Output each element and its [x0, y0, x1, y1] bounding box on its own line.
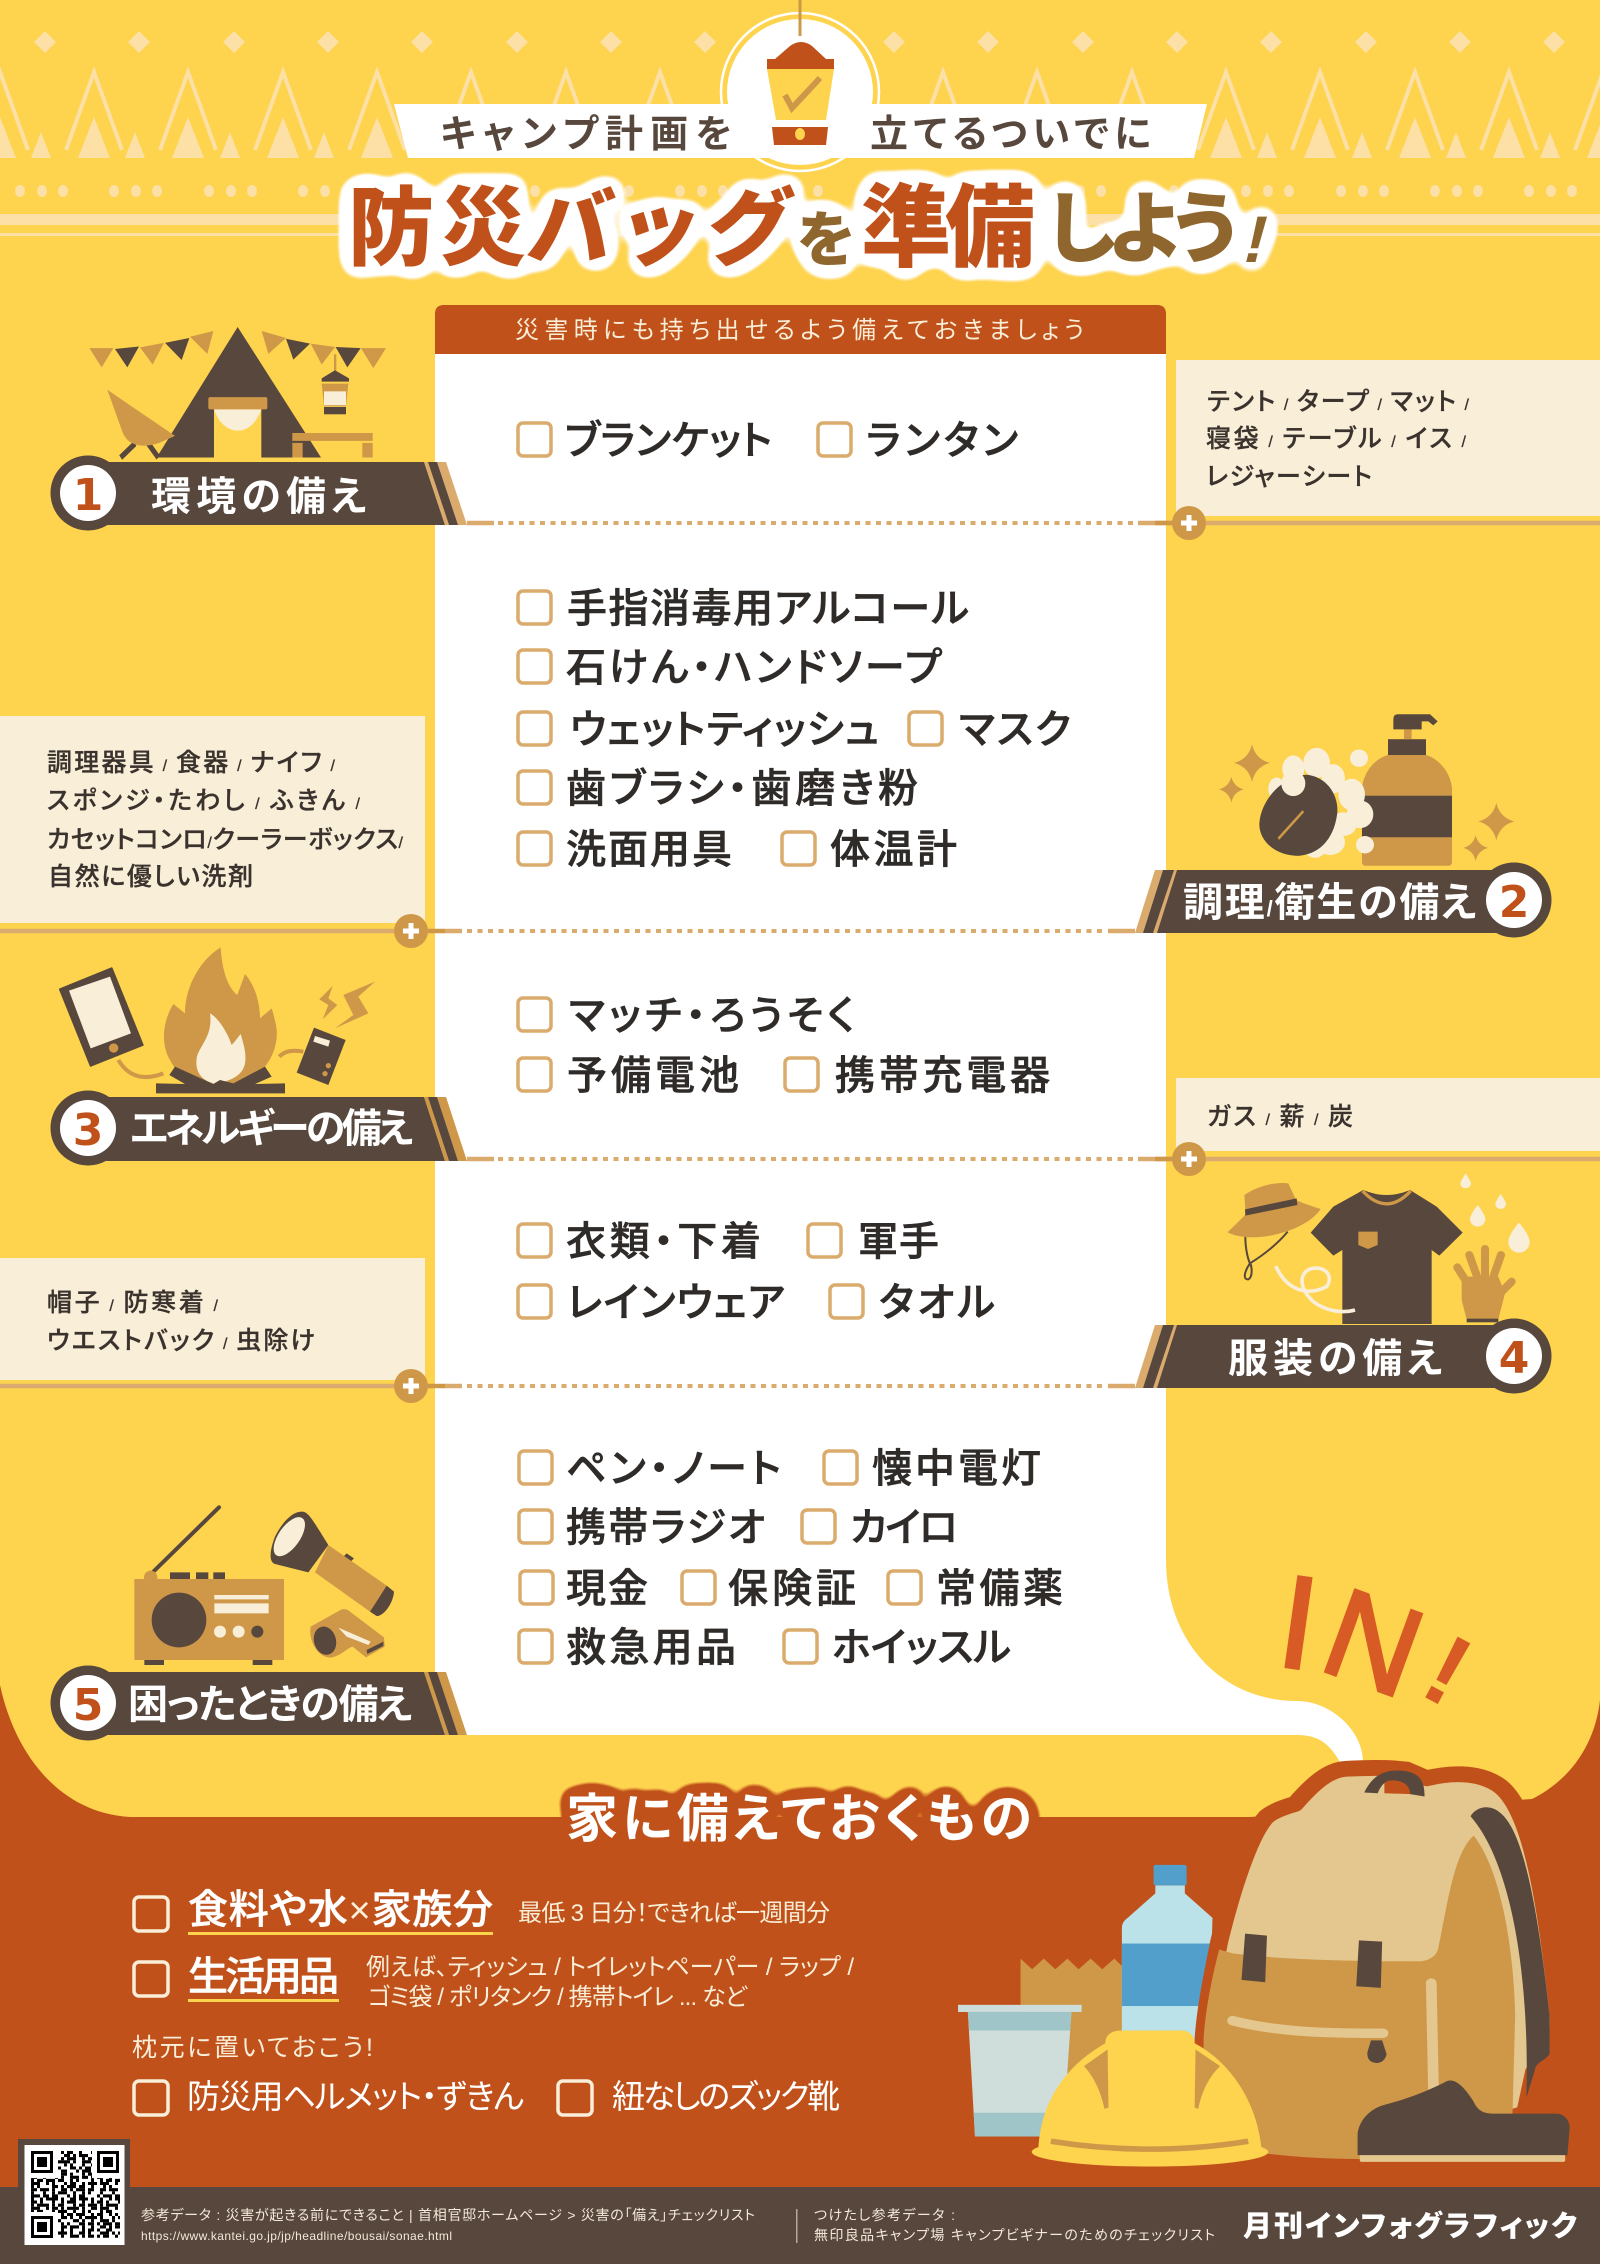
footer bar	[0, 2187, 1600, 2264]
checklist: items at home	[132, 1888, 854, 2115]
checklist: emergency: 現金	[566, 1567, 648, 1611]
checklist header text: 災害時にも持ち出せるよう備えておきましょう	[515, 317, 1084, 344]
checklist: energy: マッチ・ろうそく	[569, 994, 855, 1038]
checklist header bar	[435, 305, 1166, 354]
daily goods note: 例えば、ティッシュ / トイレットペーパー / ラップ /	[366, 1954, 854, 1981]
checklist: clothing: タオル	[879, 1281, 995, 1325]
plus icon: fuel note	[1172, 1142, 1206, 1176]
main title	[348, 179, 1277, 279]
IN! callout: N	[1307, 1561, 1441, 1724]
section banner 3: エネルギーの備え	[130, 1107, 414, 1151]
section banner 2: 調理/衛生の備え	[1183, 881, 1477, 925]
checklist: cooking and hygiene: 石けん・ハンドソープ	[566, 646, 943, 690]
checklist: environment: ランタン	[866, 419, 1018, 463]
IN! callout: !	[1407, 1614, 1489, 1728]
footer references: 参考データ : 災害が起きる前にできること | 首相官邸ホームページ > 災害の「備え」チェックリスト	[141, 2207, 755, 2223]
food and water note: 最低 3 日分！できれば一週間分	[518, 1900, 830, 1927]
checklist: energy: 予備電池	[567, 1054, 739, 1098]
plus icon: environment note	[1172, 506, 1206, 540]
checklist: clothing	[518, 1220, 995, 1325]
beige note: environment items: テント / タープ / マット /	[1207, 388, 1470, 416]
section banner 1: 環境の備え	[151, 475, 367, 519]
plus icon: clothing note	[394, 1369, 428, 1403]
daily goods heading: 生活用品	[188, 1955, 339, 1999]
checklist: emergency: ペン・ノート	[566, 1447, 781, 1491]
section banner 4	[1135, 1318, 1552, 1394]
safety helmet	[1032, 2031, 1268, 2167]
beige note: clothing items: 帽子 / 防寒着 /	[47, 1289, 219, 1317]
checklist: energy: 携帯充電器	[835, 1054, 1050, 1098]
beige note: environment items: 寝袋 / テーブル / イス /	[1206, 425, 1467, 453]
checklist: environment: ブランケット	[565, 419, 772, 463]
section banner 5	[50, 1666, 467, 1740]
icon: campfire, tablet and power bank	[60, 947, 375, 1093]
main title: を	[797, 207, 855, 274]
icon: lantern with check	[767, 42, 834, 145]
plus icon: cooking note	[394, 914, 428, 948]
lantern circle badge	[721, 0, 879, 171]
main title: バッグ	[524, 182, 797, 276]
checklist: emergency: 救急用品	[566, 1626, 736, 1670]
checklist: emergency: カイロ	[850, 1506, 958, 1550]
paper bag	[1021, 1959, 1123, 2074]
main title: しよう	[1047, 185, 1237, 273]
section banner 2	[1135, 862, 1552, 938]
IN! callout	[1270, 1547, 1489, 1728]
beige note: cooking items: カセットコンロ/クーラーボックス/	[47, 826, 404, 854]
shoe	[1358, 2081, 1570, 2162]
food and water heading: 食料や水×家族分	[188, 1888, 493, 1932]
checklist: emergency: 保険証	[728, 1567, 856, 1611]
checklist: energy	[518, 994, 1050, 1098]
section banner 1: 1	[73, 470, 103, 521]
water bottle	[1122, 1865, 1213, 2074]
checklist: emergency: 懐中電灯	[872, 1447, 1041, 1491]
IN! callout: I	[1270, 1547, 1327, 1698]
beige note: cooking items: 自然に優しい洗剤	[48, 863, 253, 891]
plastic cup	[958, 2005, 1082, 2137]
checklist: clothing: 衣類・下着	[566, 1220, 761, 1264]
main title: 準備	[861, 179, 1035, 279]
checklist: emergency	[519, 1447, 1063, 1670]
footer references: https://www.kantei.go.jp/jp/headline/bousai/sonae.html	[141, 2229, 452, 2243]
beige note: fuel items	[1176, 1078, 1600, 1151]
panel: white checklist column	[435, 354, 1363, 1762]
footer references: つけたし参考データ :	[814, 2207, 955, 2223]
beige note: environment items	[1176, 360, 1600, 516]
checklist: cooking and hygiene: ウェットティッシュ	[570, 708, 879, 752]
icon: hat, t-shirt, towel and glove	[1228, 1173, 1530, 1324]
subtitle left text: キャンプ計画を	[440, 114, 732, 156]
main title: !	[1236, 203, 1277, 277]
section banner 1	[50, 456, 467, 530]
section banner 4: 服装の備え	[1228, 1337, 1443, 1381]
beige note: environment items: レジャーシート	[1206, 463, 1372, 491]
main title: 防災	[348, 181, 526, 277]
checklist: cooking and hygiene: 手指消毒用アルコール	[567, 587, 969, 631]
checklist: emergency: 携帯ラジオ	[566, 1506, 765, 1550]
bedside subheading: 枕元に置いておこう!	[132, 2034, 373, 2062]
section banner 5: 困ったときの備え	[128, 1683, 413, 1727]
QR code	[18, 2139, 130, 2251]
checklist: emergency: 常備薬	[936, 1567, 1063, 1611]
beige note: clothing items	[0, 1258, 425, 1380]
beige note: cooking items: 調理器具 / 食器 / ナイフ /	[47, 749, 336, 777]
checklist: clothing: レインウェア	[567, 1281, 785, 1325]
section banner 3	[50, 1090, 467, 1166]
checklist: environment	[518, 419, 1018, 463]
connector lines	[0, 523, 1600, 1386]
helmet item: 防災用ヘルメット・ずきん	[187, 2078, 524, 2115]
beige note: clothing items: ウエストバック / 虫除け	[47, 1327, 315, 1355]
footer logo: 月刊インフォグラフィック	[1243, 2209, 1577, 2243]
illustration: backpack, bottle, cup, helmet and shoe	[958, 1768, 1570, 2167]
beige note: fuel items: ガス / 薪 / 炭	[1207, 1103, 1353, 1131]
section banner 2: 2	[1499, 877, 1529, 928]
section banner 3: 3	[73, 1105, 103, 1156]
header decorative pattern	[0, 31, 1600, 236]
subtitle ribbon	[394, 104, 1207, 158]
checklist: cooking and hygiene	[518, 587, 1071, 872]
checklist: cooking and hygiene: 体温計	[830, 828, 957, 872]
icon: tent, chair, flags and lantern	[89, 327, 386, 458]
subtitle right text: 立てるついでに	[870, 114, 1151, 156]
section title: items to keep at home: 家に備えておくもの	[566, 1791, 1032, 1849]
footer references: 無印良品キャンプ場 キャンプビギナーのためのチェックリスト	[814, 2227, 1215, 2243]
shoes item: 紐なしのズック靴	[612, 2078, 840, 2115]
beige note: cooking items: スポンジ・たわし / ふきん /	[47, 787, 361, 815]
checklist: clothing: 軍手	[858, 1220, 939, 1264]
icon: soap and pump bottle	[1219, 714, 1514, 866]
icon: radio, flashlight and whistle	[134, 1507, 394, 1665]
beige note: cooking items	[0, 716, 425, 923]
checklist: cooking and hygiene: 洗面用具	[566, 828, 732, 872]
backpack	[1204, 1768, 1559, 2159]
footer references	[141, 2207, 1215, 2243]
checklist: items at home: ゴミ袋 / ポリタンク / 携帯トイレ ... など	[368, 1984, 748, 2011]
section banner 5: 5	[73, 1680, 103, 1731]
checklist: cooking and hygiene: マスク	[959, 708, 1071, 752]
checklist: emergency: ホイッスル	[832, 1626, 1011, 1670]
checklist: cooking and hygiene: 歯ブラシ・歯磨き粉	[566, 767, 918, 811]
section banner 4: 4	[1499, 1333, 1529, 1384]
